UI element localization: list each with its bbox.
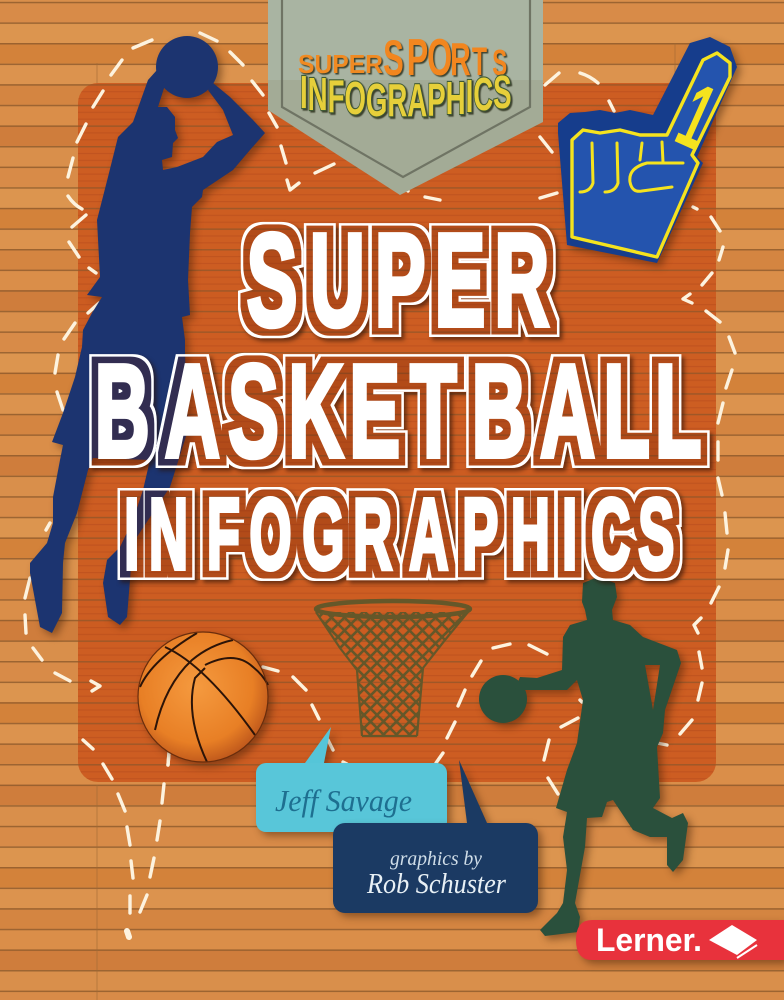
speech bubble: illustrator bbox=[333, 760, 538, 913]
speech bubble: illustrator: graphics by bbox=[390, 848, 482, 870]
pennant banner bbox=[268, 0, 543, 195]
orange court panel bbox=[78, 83, 716, 782]
series logo: Super Sports Infographics: SPORTS bbox=[383, 29, 507, 87]
icon: basketball bbox=[138, 632, 268, 762]
speech bubble: illustrator: Rob Schuster bbox=[366, 868, 507, 900]
speech bubble: author bbox=[256, 727, 447, 832]
series logo: Super Sports Infographics: INFOGRAPHICS bbox=[300, 68, 512, 127]
silhouette: green dribbling player bbox=[479, 577, 688, 936]
publisher logo: Lerner: Lerner. bbox=[596, 922, 702, 958]
speech bubble: author: Jeff Savage bbox=[275, 783, 412, 818]
publisher logo: Lerner bbox=[576, 920, 784, 960]
silhouette: blue shooting player bbox=[30, 36, 265, 633]
title: BASKETBALL bbox=[95, 337, 702, 485]
icon: foam finger bbox=[558, 37, 737, 263]
series logo: Super Sports Infographics bbox=[298, 29, 512, 127]
icon: hoop and net bbox=[310, 601, 475, 740]
title bbox=[95, 206, 702, 591]
title: INFOGRAPHICS bbox=[124, 479, 674, 591]
icon: foam finger: 1 bbox=[664, 65, 729, 169]
series logo: Super Sports Infographics: SUPER bbox=[298, 49, 383, 79]
title: SUPER bbox=[246, 206, 549, 354]
